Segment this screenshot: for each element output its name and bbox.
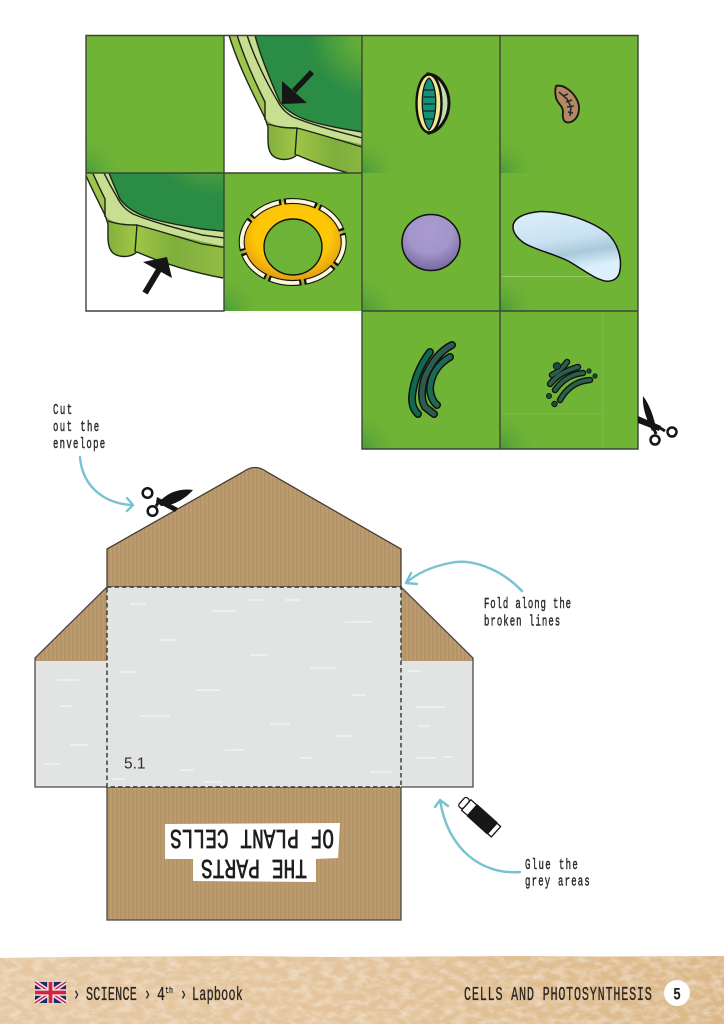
arrow: cut	[80, 457, 133, 511]
text: cut instruction: Cut	[53, 402, 72, 419]
breadcrumb: ›	[144, 984, 151, 1006]
text: fold instruction: broken lines	[484, 613, 560, 630]
grey glue panel	[107, 587, 401, 787]
panel: cut-out organelle grid	[85, 34, 639, 450]
breadcrumb: 4	[157, 984, 165, 1006]
breadcrumb: th	[165, 986, 173, 996]
breadcrumb: SCIENCE	[86, 984, 137, 1006]
green square: nucleus ring	[224, 173, 362, 311]
icon: UK flag	[35, 982, 66, 1003]
green square: blank	[86, 35, 224, 173]
text: fold instruction	[484, 596, 571, 630]
text: cut instruction	[53, 402, 105, 453]
text: glue instruction: grey areas	[525, 873, 590, 890]
green square: purple nucleolus	[362, 173, 500, 311]
page number: 5	[673, 985, 681, 1005]
breadcrumb	[73, 984, 243, 1006]
paper scratches	[45, 600, 453, 782]
upside-down envelope label: THE PARTS	[201, 851, 307, 881]
green square: golgi apparatus	[500, 311, 638, 449]
section title: CELLS AND PHOTOSYNTHESIS	[464, 984, 652, 1006]
text: cut instruction: envelope	[53, 436, 105, 453]
green square: chloroplast	[362, 35, 500, 173]
icon: scissors on envelope	[143, 488, 193, 516]
square: cell wall lower with arrow	[86, 174, 224, 294]
footer band	[0, 956, 724, 1024]
arrow: fold	[406, 562, 522, 591]
square: cell wall and membrane with arrow	[228, 36, 362, 172]
green square: endoplasmic reticulum	[362, 311, 500, 449]
text: glue instruction: Glue the	[525, 857, 578, 874]
breadcrumb: ›	[180, 984, 187, 1006]
left side flap	[35, 587, 107, 787]
icon: scissors at grid corner	[638, 396, 676, 444]
upside-down envelope label	[165, 821, 340, 882]
icon: glue stick	[456, 795, 501, 838]
text: cut instruction: out the	[53, 419, 99, 436]
green square: vacuole	[500, 173, 638, 311]
panel: envelope template	[35, 468, 473, 920]
top flap	[107, 468, 401, 587]
text: fold instruction: Fold along the	[484, 596, 571, 613]
text: glue instruction	[525, 857, 590, 890]
section number: 5.1	[124, 756, 146, 772]
breadcrumb: Lapbook	[192, 984, 243, 1006]
page number	[664, 980, 690, 1006]
arrow: glue	[435, 800, 520, 872]
fold lines	[107, 587, 401, 787]
torn paper background	[0, 956, 724, 1024]
breadcrumb: ›	[73, 984, 80, 1006]
right side flap	[401, 587, 473, 787]
green square: mitochondrion	[500, 35, 638, 173]
bottom flap	[107, 787, 401, 920]
upside-down envelope label: OF PLANT CELLS	[170, 821, 334, 851]
